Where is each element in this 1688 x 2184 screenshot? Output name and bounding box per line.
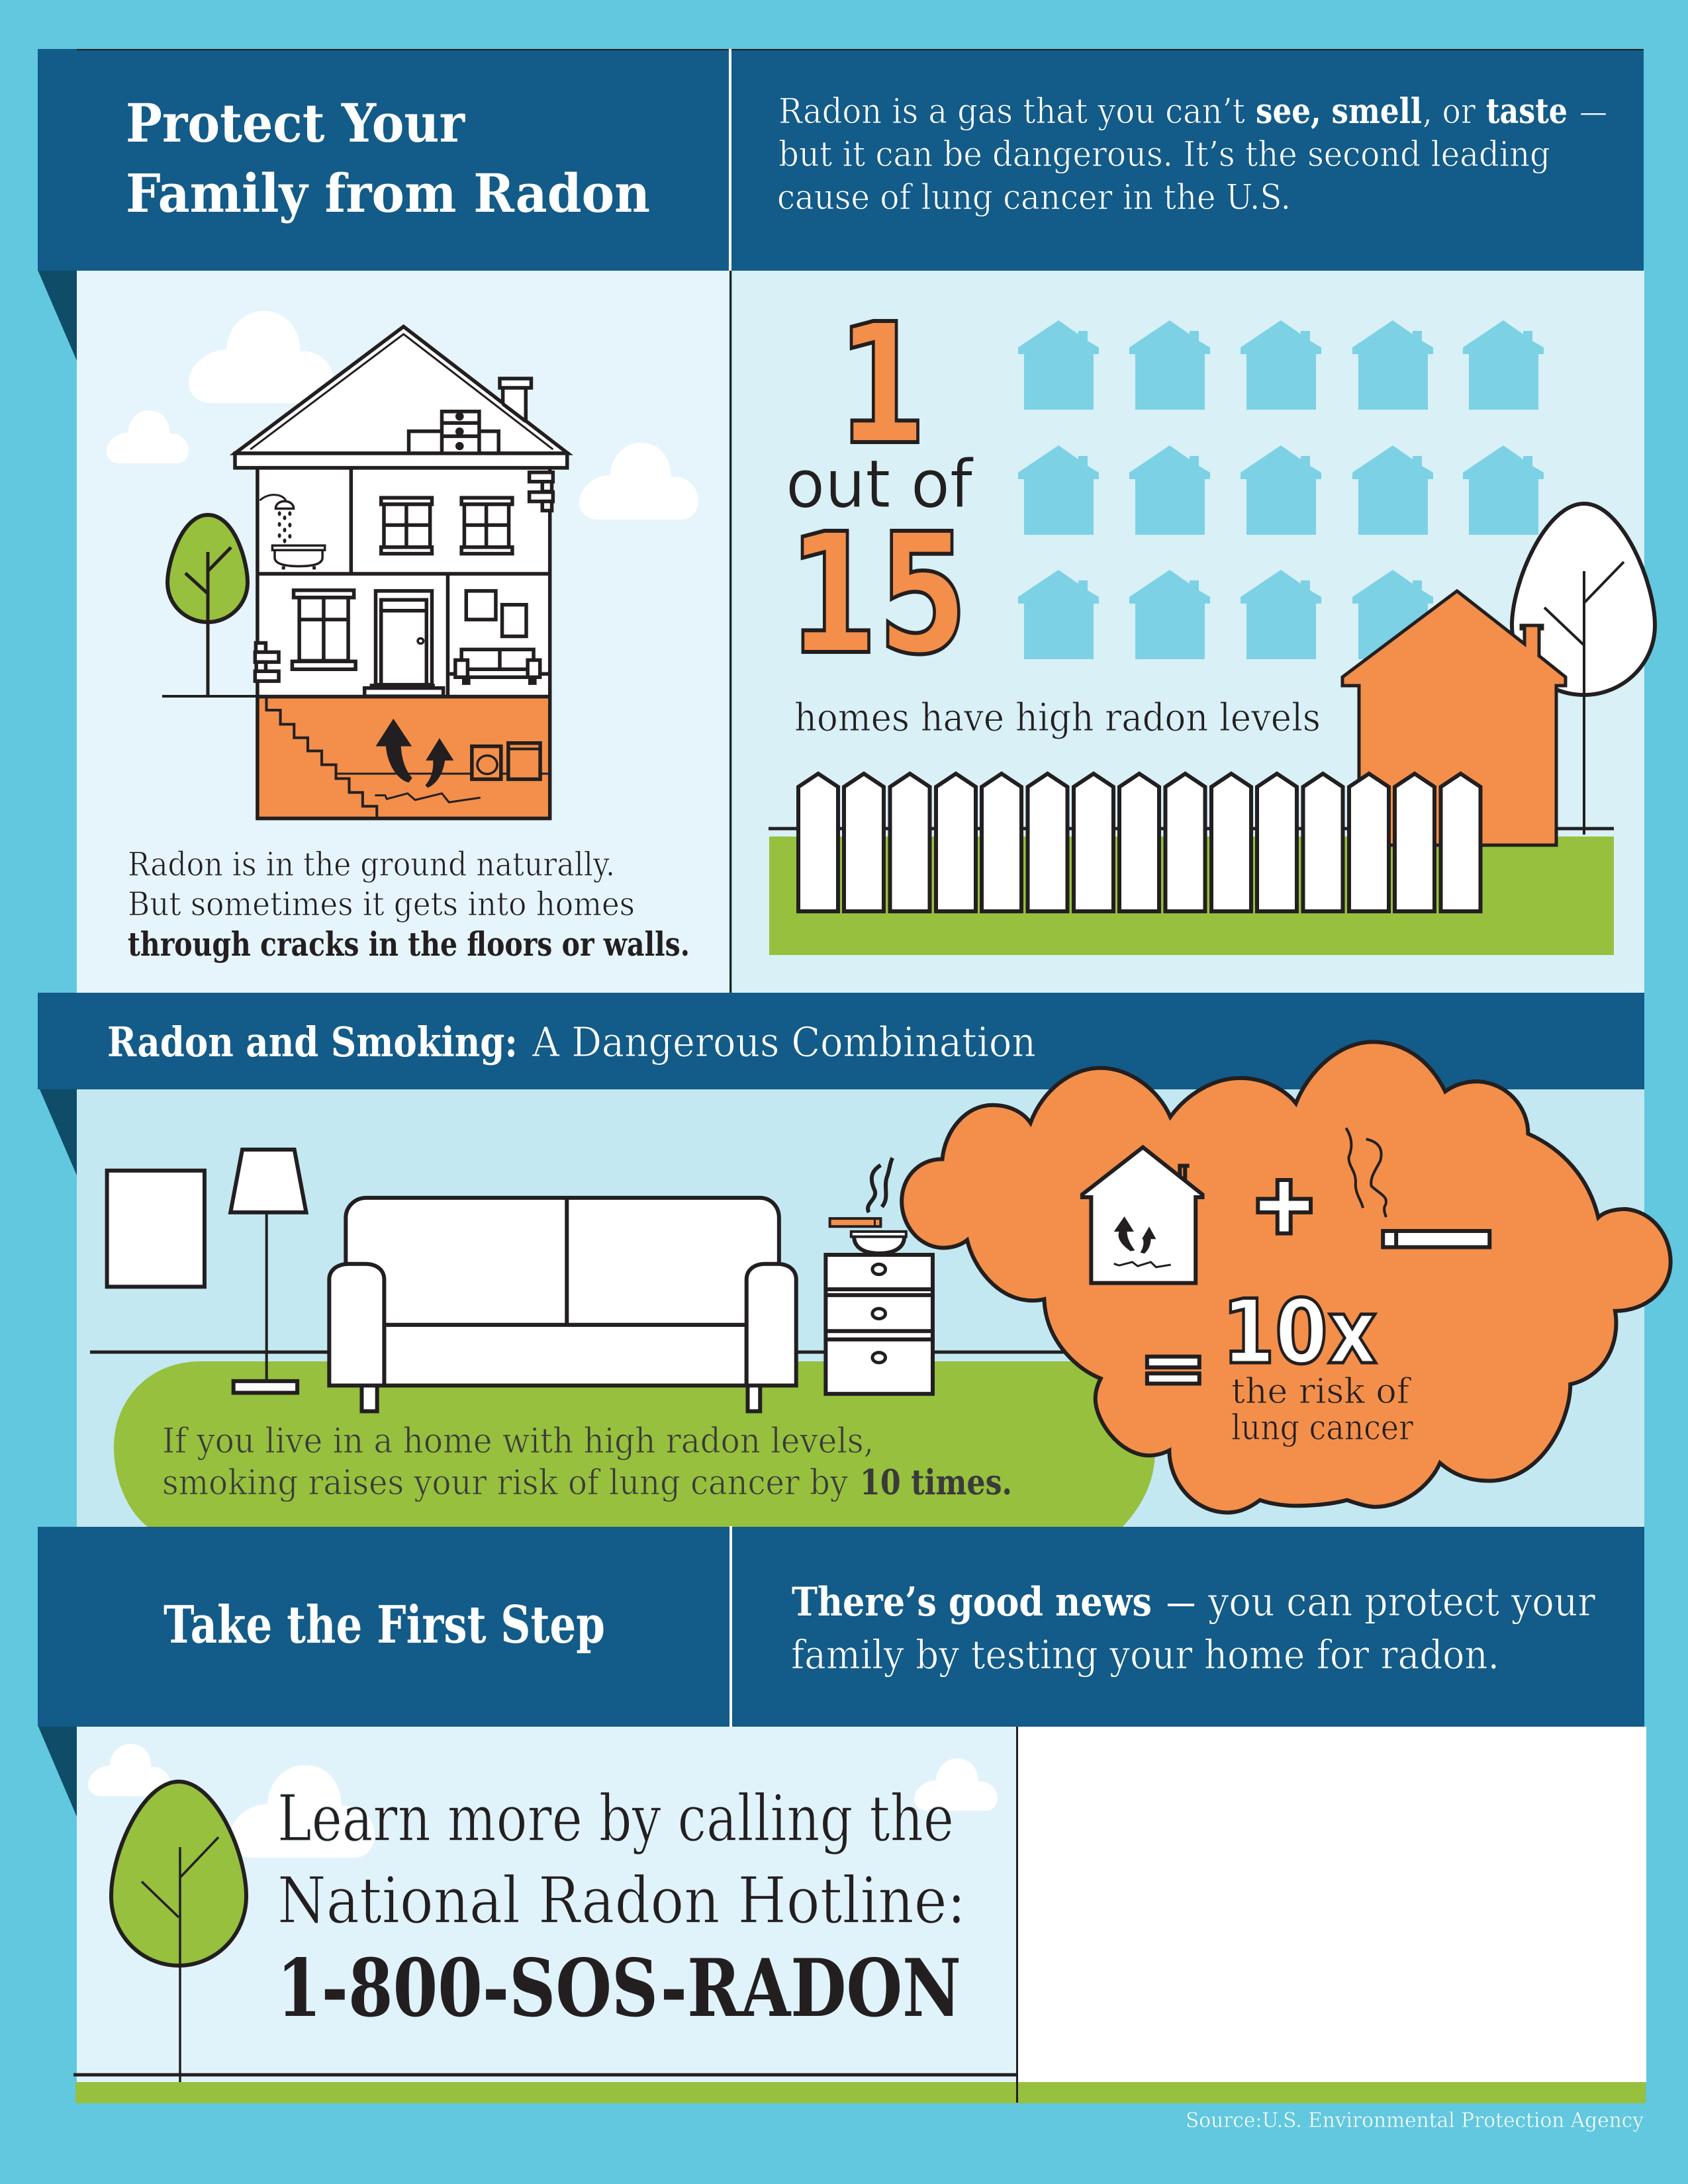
icon: clouds (107, 311, 698, 520)
statistic: 1 out of 15: 15 (788, 498, 968, 692)
text: 10x the risk of lung cancer: the risk of (1231, 1372, 1412, 1412)
text: good news: — (1166, 1579, 1196, 1625)
text: radon in the ground (128, 845, 690, 964)
icon: clouds (88, 1744, 998, 1858)
heading: Take the First Step (164, 1595, 605, 1655)
lawn and ground line (769, 829, 1614, 955)
intro text: but it can be dangerous. It’s the second leading (778, 135, 1550, 175)
statistic: 1 out of 15: 1 (837, 289, 927, 482)
intro text (777, 91, 1607, 218)
text: smoking risk: 10 times. (860, 1463, 1012, 1503)
panel: radon and smoking (38, 993, 1671, 1527)
text: 10x the risk of lung cancer: lung cancer (1231, 1408, 1413, 1448)
intro text: taste (1486, 91, 1568, 132)
equation icons: house + cigarette = (1082, 1128, 1489, 1384)
title: Family from Radon (126, 162, 650, 224)
section heading band: Radon and Smoking: (107, 1018, 518, 1066)
intro text: cause of lung cancer in the U.S. (777, 178, 1291, 218)
icon: fold shadow (40, 1089, 77, 1175)
icon: fold shadow (38, 270, 77, 361)
icon: fold shadow (38, 1727, 77, 1817)
icon grid: blue houses (1018, 320, 1544, 659)
green rug (114, 1361, 1155, 1527)
text: 10x the risk of lung cancer: 10x (1222, 1281, 1377, 1384)
text: radon in the ground: But sometimes it gets into homes (128, 885, 635, 923)
title: Protect Your (126, 92, 465, 154)
green strip (75, 2082, 1646, 2103)
text: hotline (277, 1782, 966, 2035)
text: hotline: Learn more by calling the (277, 1782, 954, 1856)
icon: white tree (1512, 504, 1655, 835)
text: good news: you can protect your (1207, 1579, 1595, 1625)
intro text: see, smell (1256, 91, 1422, 132)
floor line (90, 1350, 1072, 1354)
statistic: 1 out of 15: out of (786, 445, 974, 523)
icon: living room furniture (107, 1150, 933, 1411)
band: take the first step (38, 1526, 1644, 1732)
text: homes have high radon levels: homes have high radon levels (794, 695, 1321, 740)
icon: tall green tree (111, 1782, 246, 2082)
section heading band (38, 993, 1644, 1089)
text: 10x the risk of lung cancer (1222, 1281, 1413, 1448)
title (126, 92, 650, 224)
text: smoking risk: If you live in a home with high radon levels, (162, 1422, 874, 1461)
statistic: 1 out of 15 (786, 289, 974, 692)
text: radon in the ground: through cracks in the floors or walls. (128, 925, 690, 964)
callout: orange smoke cloud (902, 1042, 1671, 1513)
house cross-section illustration (235, 326, 568, 820)
text: hotline: National Radon Hotline: (277, 1864, 966, 1938)
text: hotline: 1-800-SOS-RADON (277, 1942, 961, 2035)
text: good news (791, 1579, 1595, 1678)
intro text: — (1579, 92, 1607, 132)
blank white panel (1018, 1727, 1646, 2082)
source note: Source:U.S. Environmental Protection Agency (1186, 2109, 1644, 2132)
icon: orange house (1342, 591, 1566, 845)
section heading band: A Dangerous Combination (532, 1018, 1036, 1066)
icon: picket fence (798, 774, 1480, 911)
icon: green tree (162, 515, 258, 696)
text: good news: family by testing your home for radon. (791, 1632, 1499, 1678)
panel: hotline (38, 1727, 1646, 2103)
intro text: Radon is a gas that you can’t (778, 92, 1245, 132)
text: radon in the ground: Radon is in the ground naturally. (128, 845, 615, 884)
panel: 1 out of 15 homes (732, 270, 1655, 993)
text: smoking risk: smoking raises your risk of lung cancer by (162, 1463, 849, 1503)
text: smoking risk (162, 1422, 1012, 1503)
panel: how radon enters the home (38, 270, 731, 993)
text: good news: There’s good news (792, 1579, 1152, 1625)
header band (38, 49, 1644, 271)
intro text: , or (1423, 92, 1476, 132)
